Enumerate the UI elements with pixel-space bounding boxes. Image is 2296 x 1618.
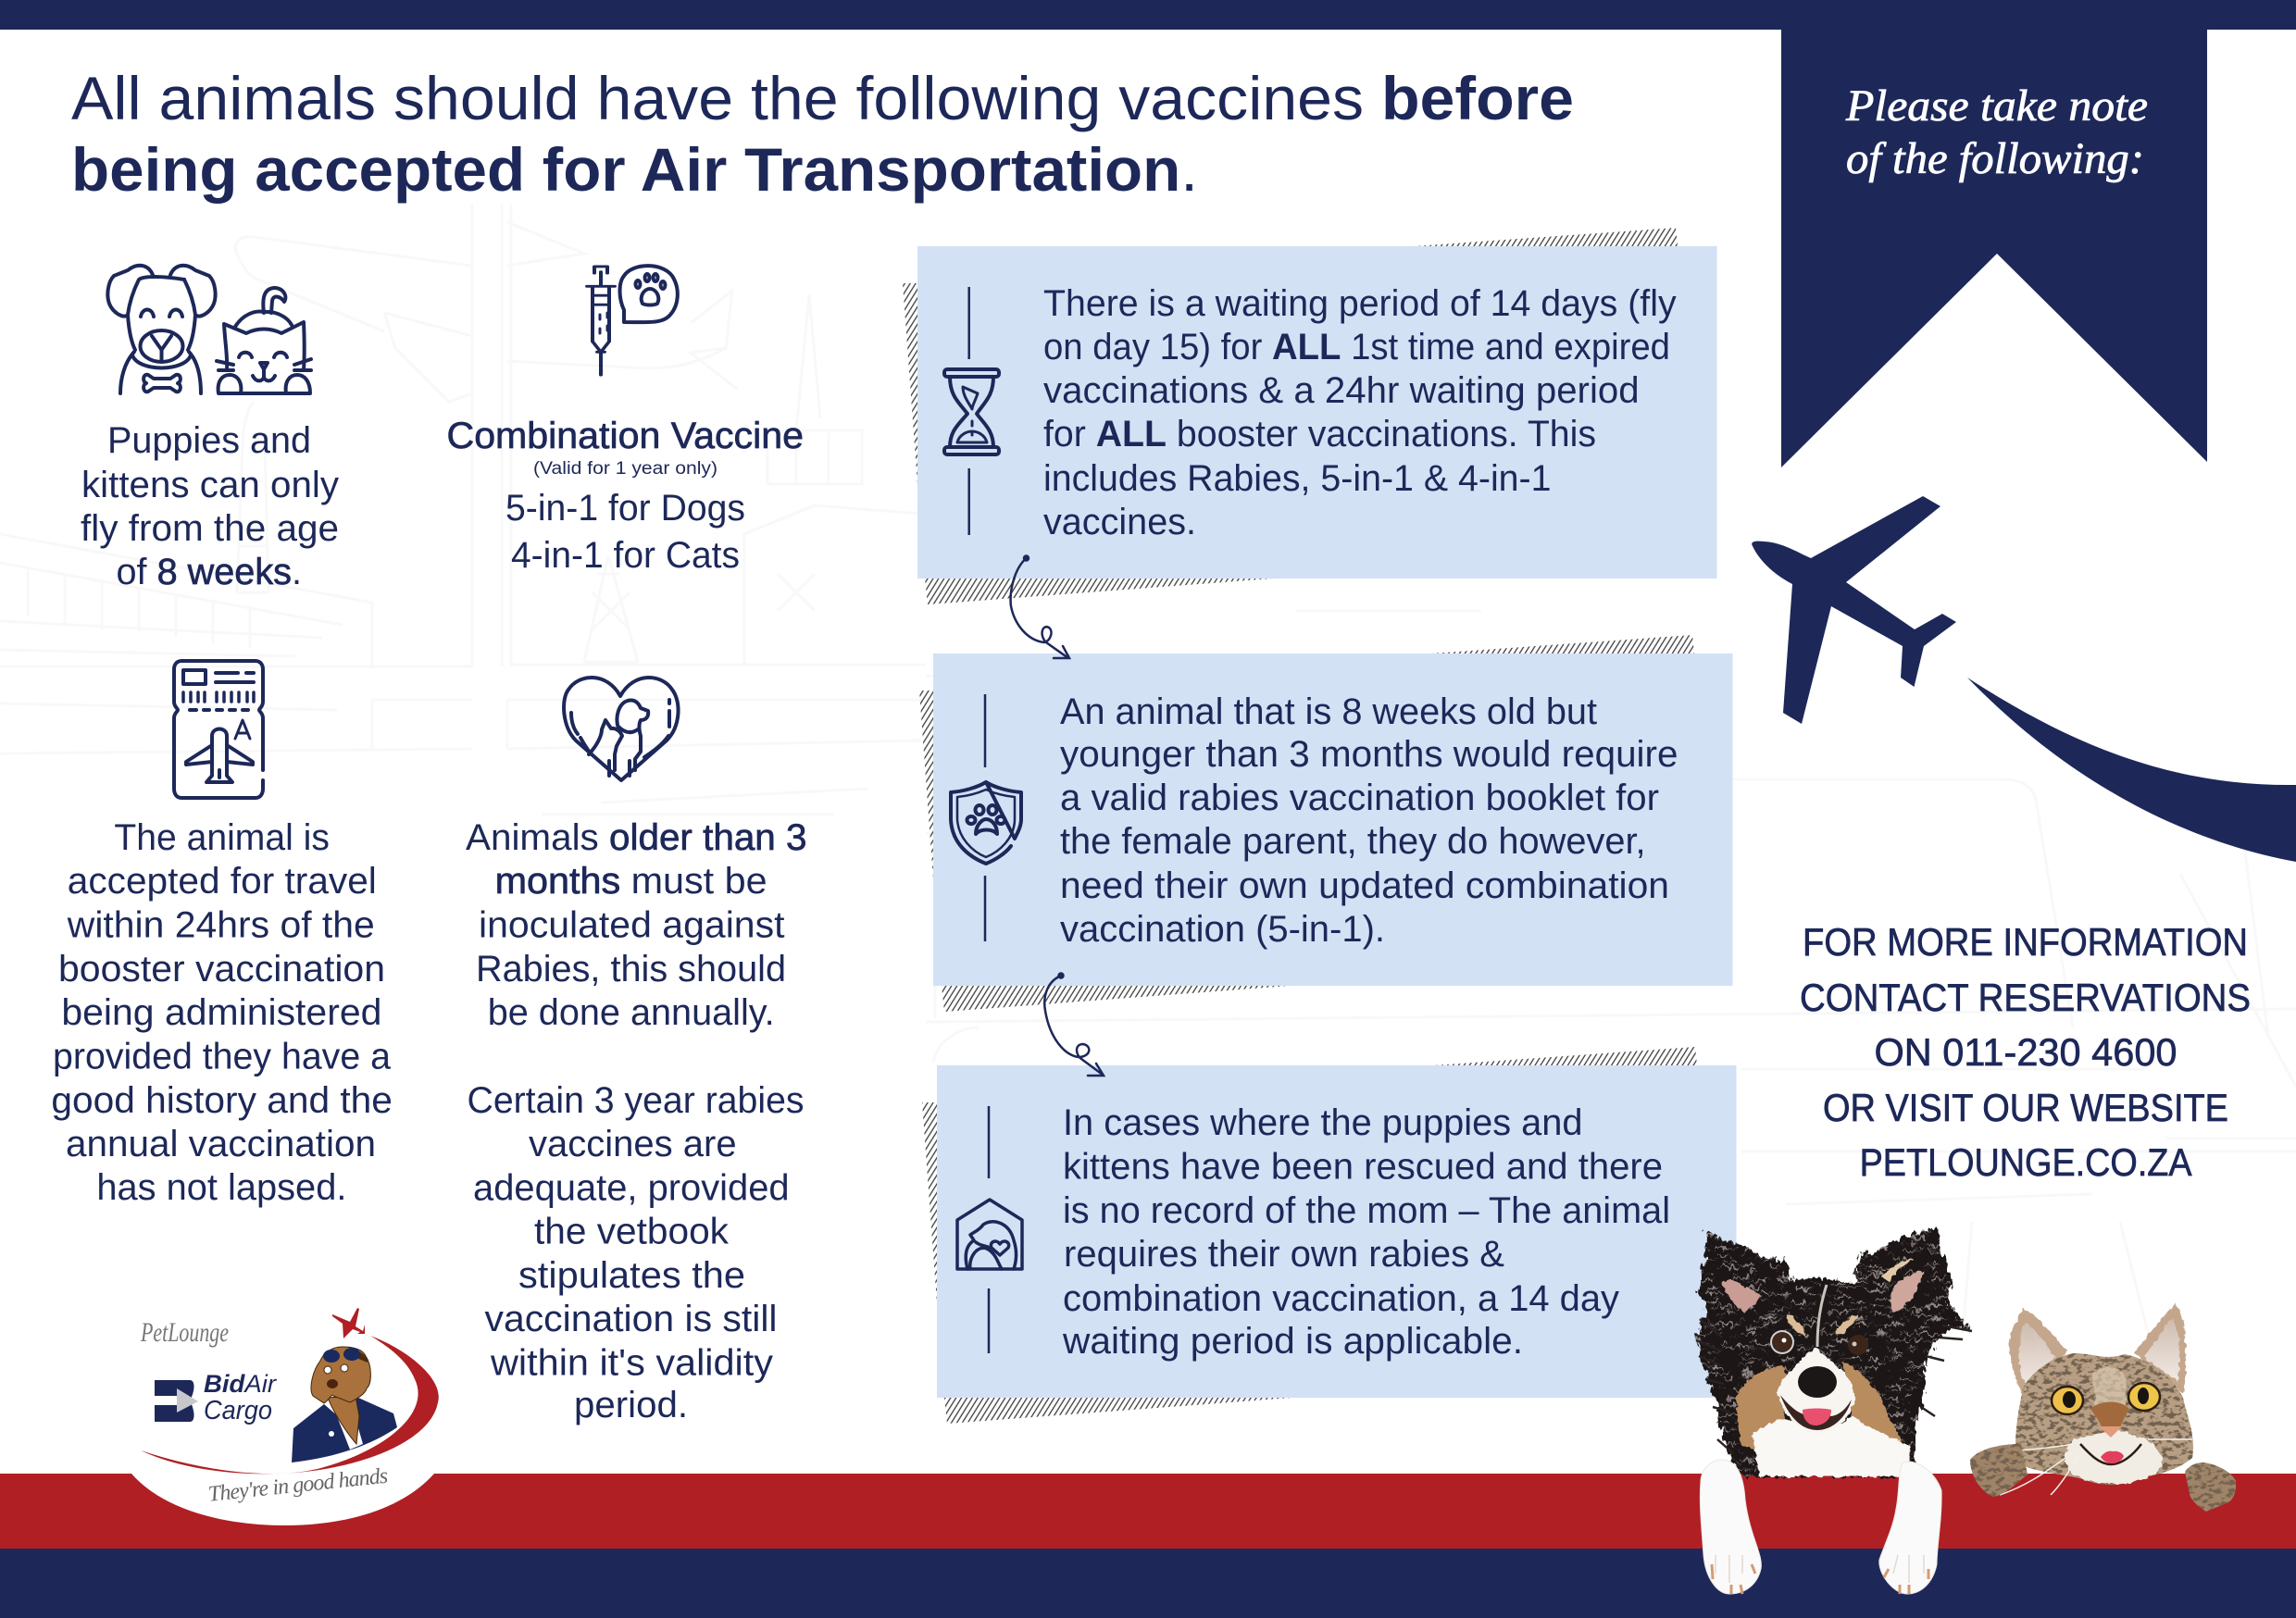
logo swoosh	[141, 1336, 439, 1474]
divider lines	[988, 1106, 990, 1353]
text: accepted within 24hrs: within 24hrs of the	[67, 905, 375, 946]
contact information: CONTACT RESERVATIONS	[1800, 976, 2251, 1019]
cat eyes	[2052, 1383, 2160, 1414]
text: accepted within 24hrs: The animal is	[114, 817, 330, 858]
dog fur	[1696, 1228, 1972, 1476]
cat ears	[2009, 1304, 2186, 1402]
text: rabies inoculation: stipulates the	[518, 1255, 745, 1296]
dog ears inner	[1722, 1259, 1924, 1313]
text: rabies inoculation	[466, 817, 807, 1425]
text: There is a waiting period of 14 days (fly	[1043, 283, 1677, 324]
background: faint airport line art	[0, 204, 2296, 1333]
dog claws	[1712, 1564, 1928, 1594]
icon: heart with cat and dog	[564, 678, 679, 780]
title	[71, 64, 1574, 204]
text: puppies and kittens	[81, 420, 339, 592]
panel: under 3 months	[919, 635, 1733, 1012]
text: rabies inoculation: period.	[574, 1385, 688, 1425]
divider lines	[984, 694, 986, 941]
text: vaccinations & a 24hr waiting period	[1043, 370, 1640, 411]
text: waiting period is applicable.	[1062, 1321, 1523, 1362]
dog eyes	[1770, 1330, 1868, 1355]
PetLounge text: PetLounge	[140, 1317, 229, 1348]
bottom navy band	[0, 1549, 2296, 1618]
cat nose and mouth	[2099, 1426, 2122, 1438]
icon: hourglass	[944, 369, 999, 454]
text: a valid rabies vaccination booklet for	[1060, 778, 1659, 818]
dog toes	[1716, 1555, 1924, 1583]
dog paws	[1700, 1460, 1941, 1594]
text: vaccination (5-in-1).	[1060, 909, 1385, 950]
text: rabies inoculation: vaccination is still	[485, 1299, 778, 1339]
panel: waiting period	[903, 228, 1716, 604]
bottom red band	[0, 1474, 2296, 1549]
text: rabies inoculation: vaccines are	[529, 1124, 737, 1164]
divider lines	[967, 287, 970, 535]
dog	[107, 266, 216, 393]
icon: house with pets	[957, 1200, 1022, 1269]
text: An animal that is 8 weeks old but	[1060, 691, 1597, 732]
BidAir Cargo text: Cargo	[204, 1396, 272, 1425]
tagline: They're in good hands	[207, 1464, 389, 1507]
title: All animals should have the following vaccines before	[71, 64, 1574, 132]
text: on day 15) for ALL 1st time and expired	[1043, 327, 1670, 367]
text: rabies inoculation: months must be	[495, 861, 767, 902]
text: accepted within 24hrs: has not lapsed.	[96, 1167, 346, 1208]
text: accepted within 24hrs	[51, 817, 393, 1208]
icon: boarding pass	[174, 661, 263, 798]
dog blaze	[1817, 1285, 1827, 1347]
contact information: PETLOUNGE.CO.ZA	[1860, 1140, 2192, 1184]
hatch shadow	[903, 228, 1678, 604]
text: combination vaccine: 5-in-1 for Dogs	[505, 488, 745, 529]
photo: cat	[1970, 1304, 2236, 1512]
text: combination vaccination, a 14 day	[1063, 1278, 1619, 1319]
logo white ellipse	[131, 1474, 434, 1525]
dog face markings	[1736, 1314, 1910, 1476]
text: accepted within 24hrs: accepted for travel	[68, 861, 377, 902]
text	[1062, 1102, 1670, 1362]
text: combination vaccine	[446, 416, 804, 576]
text: the female parent, they do however,	[1060, 821, 1646, 862]
text: younger than 3 months would require	[1060, 734, 1678, 775]
text: rabies inoculation: adequate, provided	[473, 1168, 790, 1209]
contact information: ON 011-230 4600	[1874, 1030, 2177, 1074]
logo: PetLounge BidAir Cargo	[131, 1308, 439, 1525]
cat nose bridge	[2090, 1401, 2129, 1427]
text: puppies and kittens: fly from the age	[81, 508, 339, 549]
icon: shield with paw	[951, 782, 1021, 864]
title: being accepted for Air Transportation .	[71, 135, 1198, 204]
text: rabies inoculation: Certain 3 year rabies	[467, 1080, 804, 1121]
text	[1043, 283, 1677, 542]
dog nose	[1798, 1366, 1837, 1398]
text	[1060, 691, 1678, 950]
text: rabies inoculation: be done annually.	[488, 992, 775, 1033]
icon: airplane with swoosh	[1752, 496, 2296, 862]
banner text	[1845, 81, 2148, 183]
box background	[917, 246, 1716, 579]
hatch shadow	[919, 635, 1694, 1012]
text: accepted within 24hrs: booster vaccination	[58, 949, 385, 989]
text: rabies inoculation: Rabies, this should	[476, 949, 786, 989]
photo: dog	[1696, 1228, 1972, 1594]
text: puppies and kittens: Puppies and	[107, 420, 311, 461]
banner text: Please take note	[1845, 81, 2148, 131]
BidAir Cargo text: BidAir	[204, 1370, 277, 1398]
dog mouth	[1780, 1395, 1852, 1430]
text: requires their own rabies &	[1064, 1234, 1504, 1275]
dog fur wisps	[1696, 1319, 1972, 1453]
top navy bar	[0, 0, 2296, 30]
text: accepted within 24hrs: provided they have a	[53, 1037, 392, 1077]
text: need their own updated combination	[1060, 865, 1669, 906]
text: includes Rabies, 5-in-1 & 4-in-1	[1043, 458, 1552, 499]
text: kittens have been rescued and there	[1063, 1146, 1663, 1187]
text: vaccines.	[1043, 502, 1196, 542]
text: combination vaccine: 4-in-1 for Cats	[511, 535, 740, 576]
cat paws	[1970, 1444, 2028, 1497]
text: In cases where the puppies and	[1063, 1102, 1583, 1143]
banner text: of the following:	[1846, 134, 2144, 183]
hatch shadow	[922, 1047, 1697, 1424]
cat	[217, 288, 311, 393]
BidAir mark	[155, 1380, 198, 1422]
arrow: box one to box two	[1011, 555, 1069, 658]
text: accepted within 24hrs: annual vaccination	[66, 1124, 376, 1164]
text: rabies inoculation: the vetbook	[534, 1212, 730, 1252]
cat whiskers	[1977, 1439, 2192, 1495]
logo mascot	[292, 1347, 397, 1462]
panel: rescued animals	[922, 1047, 1737, 1424]
text: accepted within 24hrs: good history and the	[51, 1080, 393, 1121]
box background	[937, 1065, 1737, 1398]
BidAir Cargo text	[204, 1370, 277, 1425]
icon: dog and cat	[107, 266, 311, 393]
text: rabies inoculation: Animals older than 3	[466, 817, 807, 858]
logo red plane	[332, 1308, 365, 1338]
box background	[933, 653, 1733, 986]
cat head	[2015, 1353, 2193, 1485]
contact information	[1800, 920, 2251, 1184]
text: rabies inoculation: within it's validity	[490, 1342, 773, 1383]
text: is no record of the mom – The animal	[1063, 1190, 1670, 1231]
text: for ALL booster vaccinations. This	[1043, 414, 1596, 454]
contact information: FOR MORE INFORMATION	[1803, 920, 2248, 964]
text: accepted within 24hrs: being administered	[61, 992, 381, 1033]
icon: syringe and paw bubble	[587, 266, 678, 375]
banner: please take note	[1781, 30, 2207, 467]
cat forehead and chin	[2065, 1368, 2162, 1484]
arrow: box two to box three	[1044, 974, 1104, 1076]
text: puppies and kittens: of 8 weeks.	[117, 552, 302, 592]
contact information: OR VISIT OUR WEBSITE	[1823, 1086, 2228, 1129]
text: combination vaccine: (Valid for 1 year only)	[533, 459, 718, 479]
text: rabies inoculation: inoculated against	[479, 905, 785, 946]
text: puppies and kittens: kittens can only	[81, 465, 339, 505]
text: combination vaccine: Combination Vaccine	[446, 416, 804, 456]
